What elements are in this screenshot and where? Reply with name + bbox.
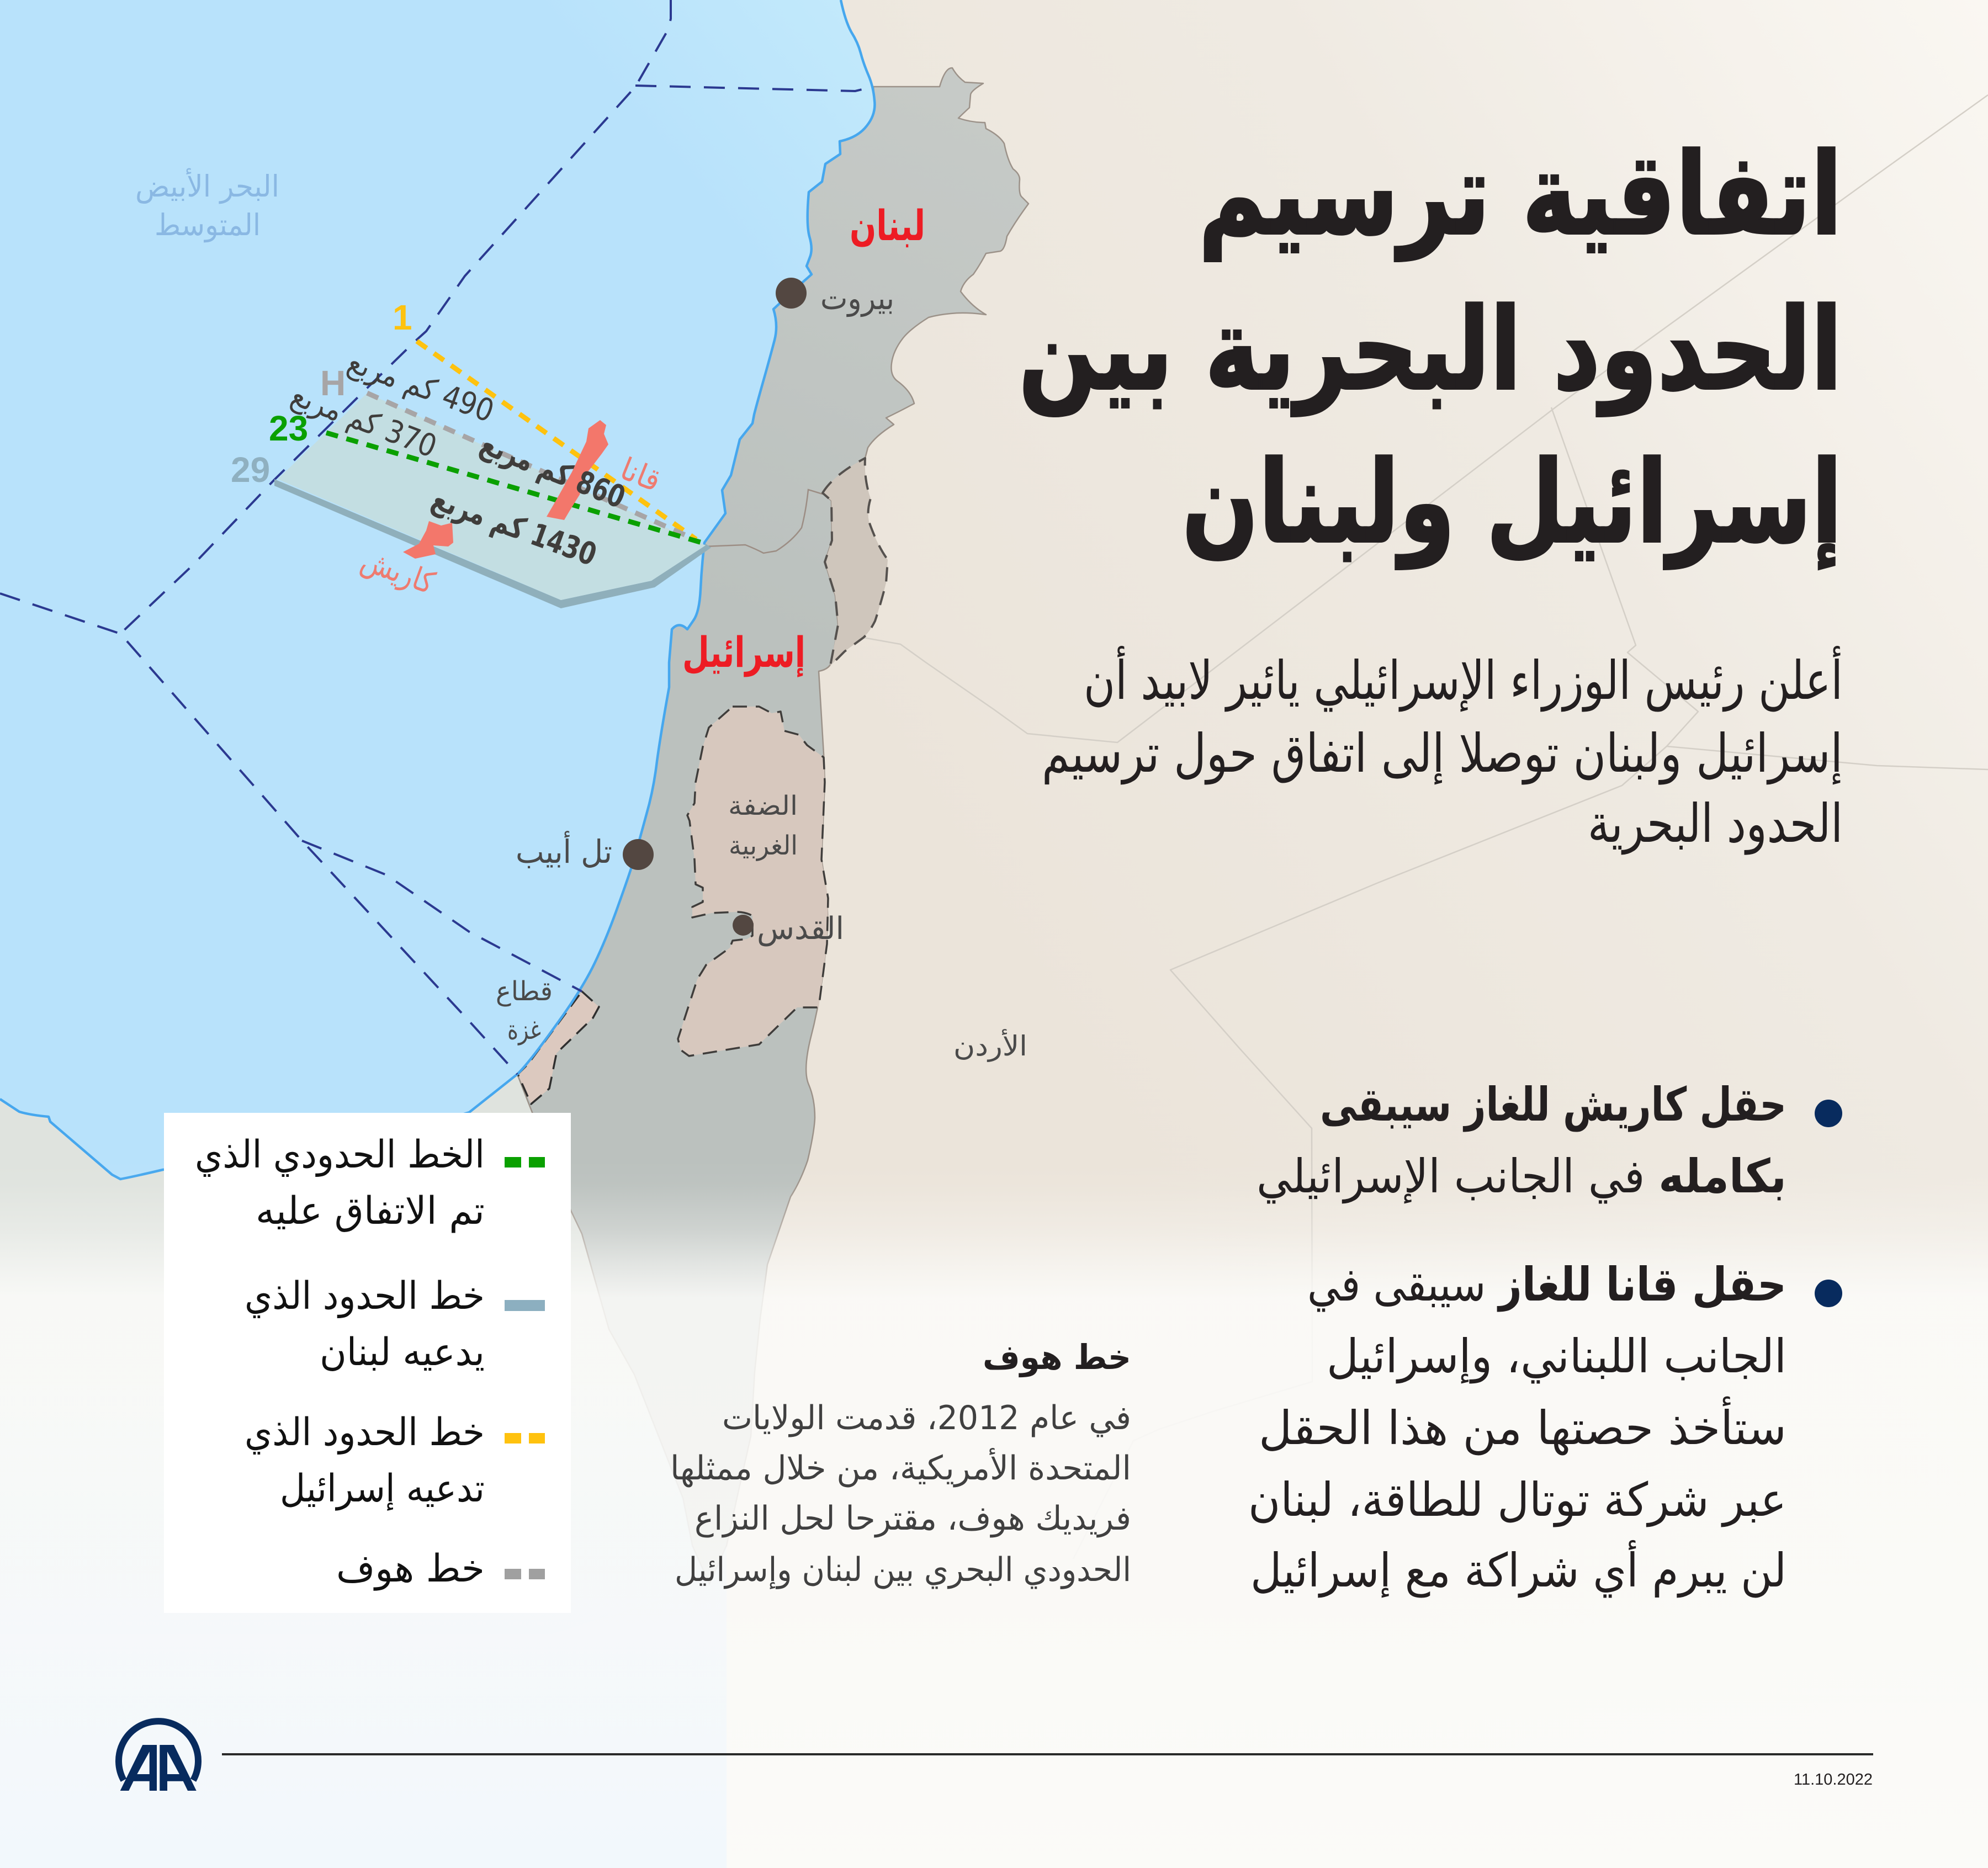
legend swatch: agreed line [505,1157,545,1168]
line labels: 29 [231,450,270,490]
label mediterranean sea [135,168,279,242]
bottom left blue tint [0,1352,727,1868]
egypt land [0,1074,709,1634]
region: west bank [678,707,828,1056]
line labels: 1 [393,298,412,337]
line labels: H [320,363,346,403]
lebanon israel border [704,490,823,553]
hof note body: فريديك هوف، مقترحا لحل النزاع [695,1499,1131,1538]
line h: hof line [367,393,692,538]
legend text: lebanon claim: يدعيه لبنان [320,1330,485,1375]
bullet: karish: حقل كاريش للغاز سيبقى [1320,1078,1786,1132]
date: 11.10.2022 [1794,1771,1873,1789]
label gaza strip: قطاع [496,976,553,1007]
region: golan heights [823,458,888,666]
legend text: israel claim: خط الحدود الذي [245,1410,485,1455]
hof note body: المتحدة الأمريكية، من خلال ممثلها [670,1448,1131,1488]
line 23: agreed line [326,433,706,544]
legend swatch: hof line [505,1569,545,1579]
line labels: 23 [269,408,308,448]
legend text: agreed line: تم الاتفاق عليه [256,1189,485,1233]
bullet: qana [1248,1257,1842,1598]
legend text: agreed line [195,1133,485,1233]
area label 860: 860 كم مربع [475,426,630,516]
bullet: karish: بكامله في الجانب الإسرائيلي [1257,1149,1786,1204]
line 1: israel claim [417,341,696,539]
label jordan: الأردن [953,1029,1027,1062]
line labels [231,298,412,490]
bottom fade overlay [0,1159,1988,1868]
city dot beirut [776,278,807,309]
anadolu agency logo [119,1721,198,1791]
bullet: qana: حقل قانا للغاز سيبقى في [1307,1257,1786,1312]
coastline [0,0,874,1179]
region: gaza strip [518,991,599,1104]
bullet: qana: لن يبرم أي شراكة مع إسرائيل [1250,1540,1786,1598]
hof note heading: خط هوف [983,1337,1131,1377]
label tel aviv: تل أبيب [516,831,612,871]
neighbouring country borders [863,95,1988,1559]
legend [164,1113,571,1613]
label jerusalem: القدس [757,911,844,947]
title [1019,129,1842,570]
intro paragraph: إسرائيل ولبنان توصلا إلى اتفاق حول ترسيم [1042,723,1843,785]
city dot tel aviv [623,839,654,870]
area label 370: 370 كم مربع [287,377,442,465]
hof note body [670,1399,1131,1589]
intro paragraph [1042,646,1843,855]
footer rule [222,1753,1873,1755]
disputed maritime area [274,393,711,608]
legend text: lebanon claim [245,1274,485,1375]
label gaza strip: غزة [507,1015,541,1046]
legend swatch: israel claim [505,1433,545,1444]
label gaza strip [496,976,553,1046]
label israel: إسرائيل [682,628,805,677]
legend text: israel claim [245,1410,485,1511]
label mediterranean sea: المتوسط [155,208,261,242]
area label 1430: 1430 كم مربع [427,481,601,573]
legend swatch: lebanon claim [505,1300,545,1311]
label mediterranean sea: البحر الأبيض [135,168,279,204]
legend text: israel claim: تدعيه إسرائيل [280,1467,485,1511]
karish gas field [403,521,453,559]
label lebanon: لبنان [850,201,925,250]
title: اتفاقية ترسيم [1199,129,1842,261]
label west bank [728,790,798,861]
qana gas field [547,420,608,520]
bullet: qana: الجانب اللبناني، وإسرائيل [1327,1329,1786,1384]
label west bank: الغربية [729,830,798,861]
area label 490: 490 كم مربع [343,344,499,429]
label beirut: بيروت [820,279,894,317]
legend text: lebanon claim: خط الحدود الذي [245,1274,485,1318]
hof note body: في عام 2012، قدمت الولايات [722,1399,1131,1437]
maritime boundary dashed lines [0,0,873,1074]
label west bank: الضفة [728,790,798,821]
bullet: karish [1257,1078,1842,1204]
city dot jerusalem [733,915,754,936]
bullet: qana: عبر شركة توتال للطاقة، لبنان [1248,1473,1786,1527]
legend text: agreed line: الخط الحدودي الذي [195,1133,485,1177]
hof line note [670,1337,1131,1589]
sea [0,0,874,1179]
bullet: qana: ستأخذ حصتها من هذا الحقل [1259,1396,1786,1456]
label karish: كاريش [357,542,439,602]
legend text: hof line: خط هوف [336,1547,485,1591]
label qana: قانا [616,451,666,499]
intro paragraph: الحدود البحرية [1588,793,1843,855]
hof note body: الحدودي البحري بين لبنان وإسرائيل [675,1551,1131,1589]
land: lebanon and israel [517,68,1029,1584]
